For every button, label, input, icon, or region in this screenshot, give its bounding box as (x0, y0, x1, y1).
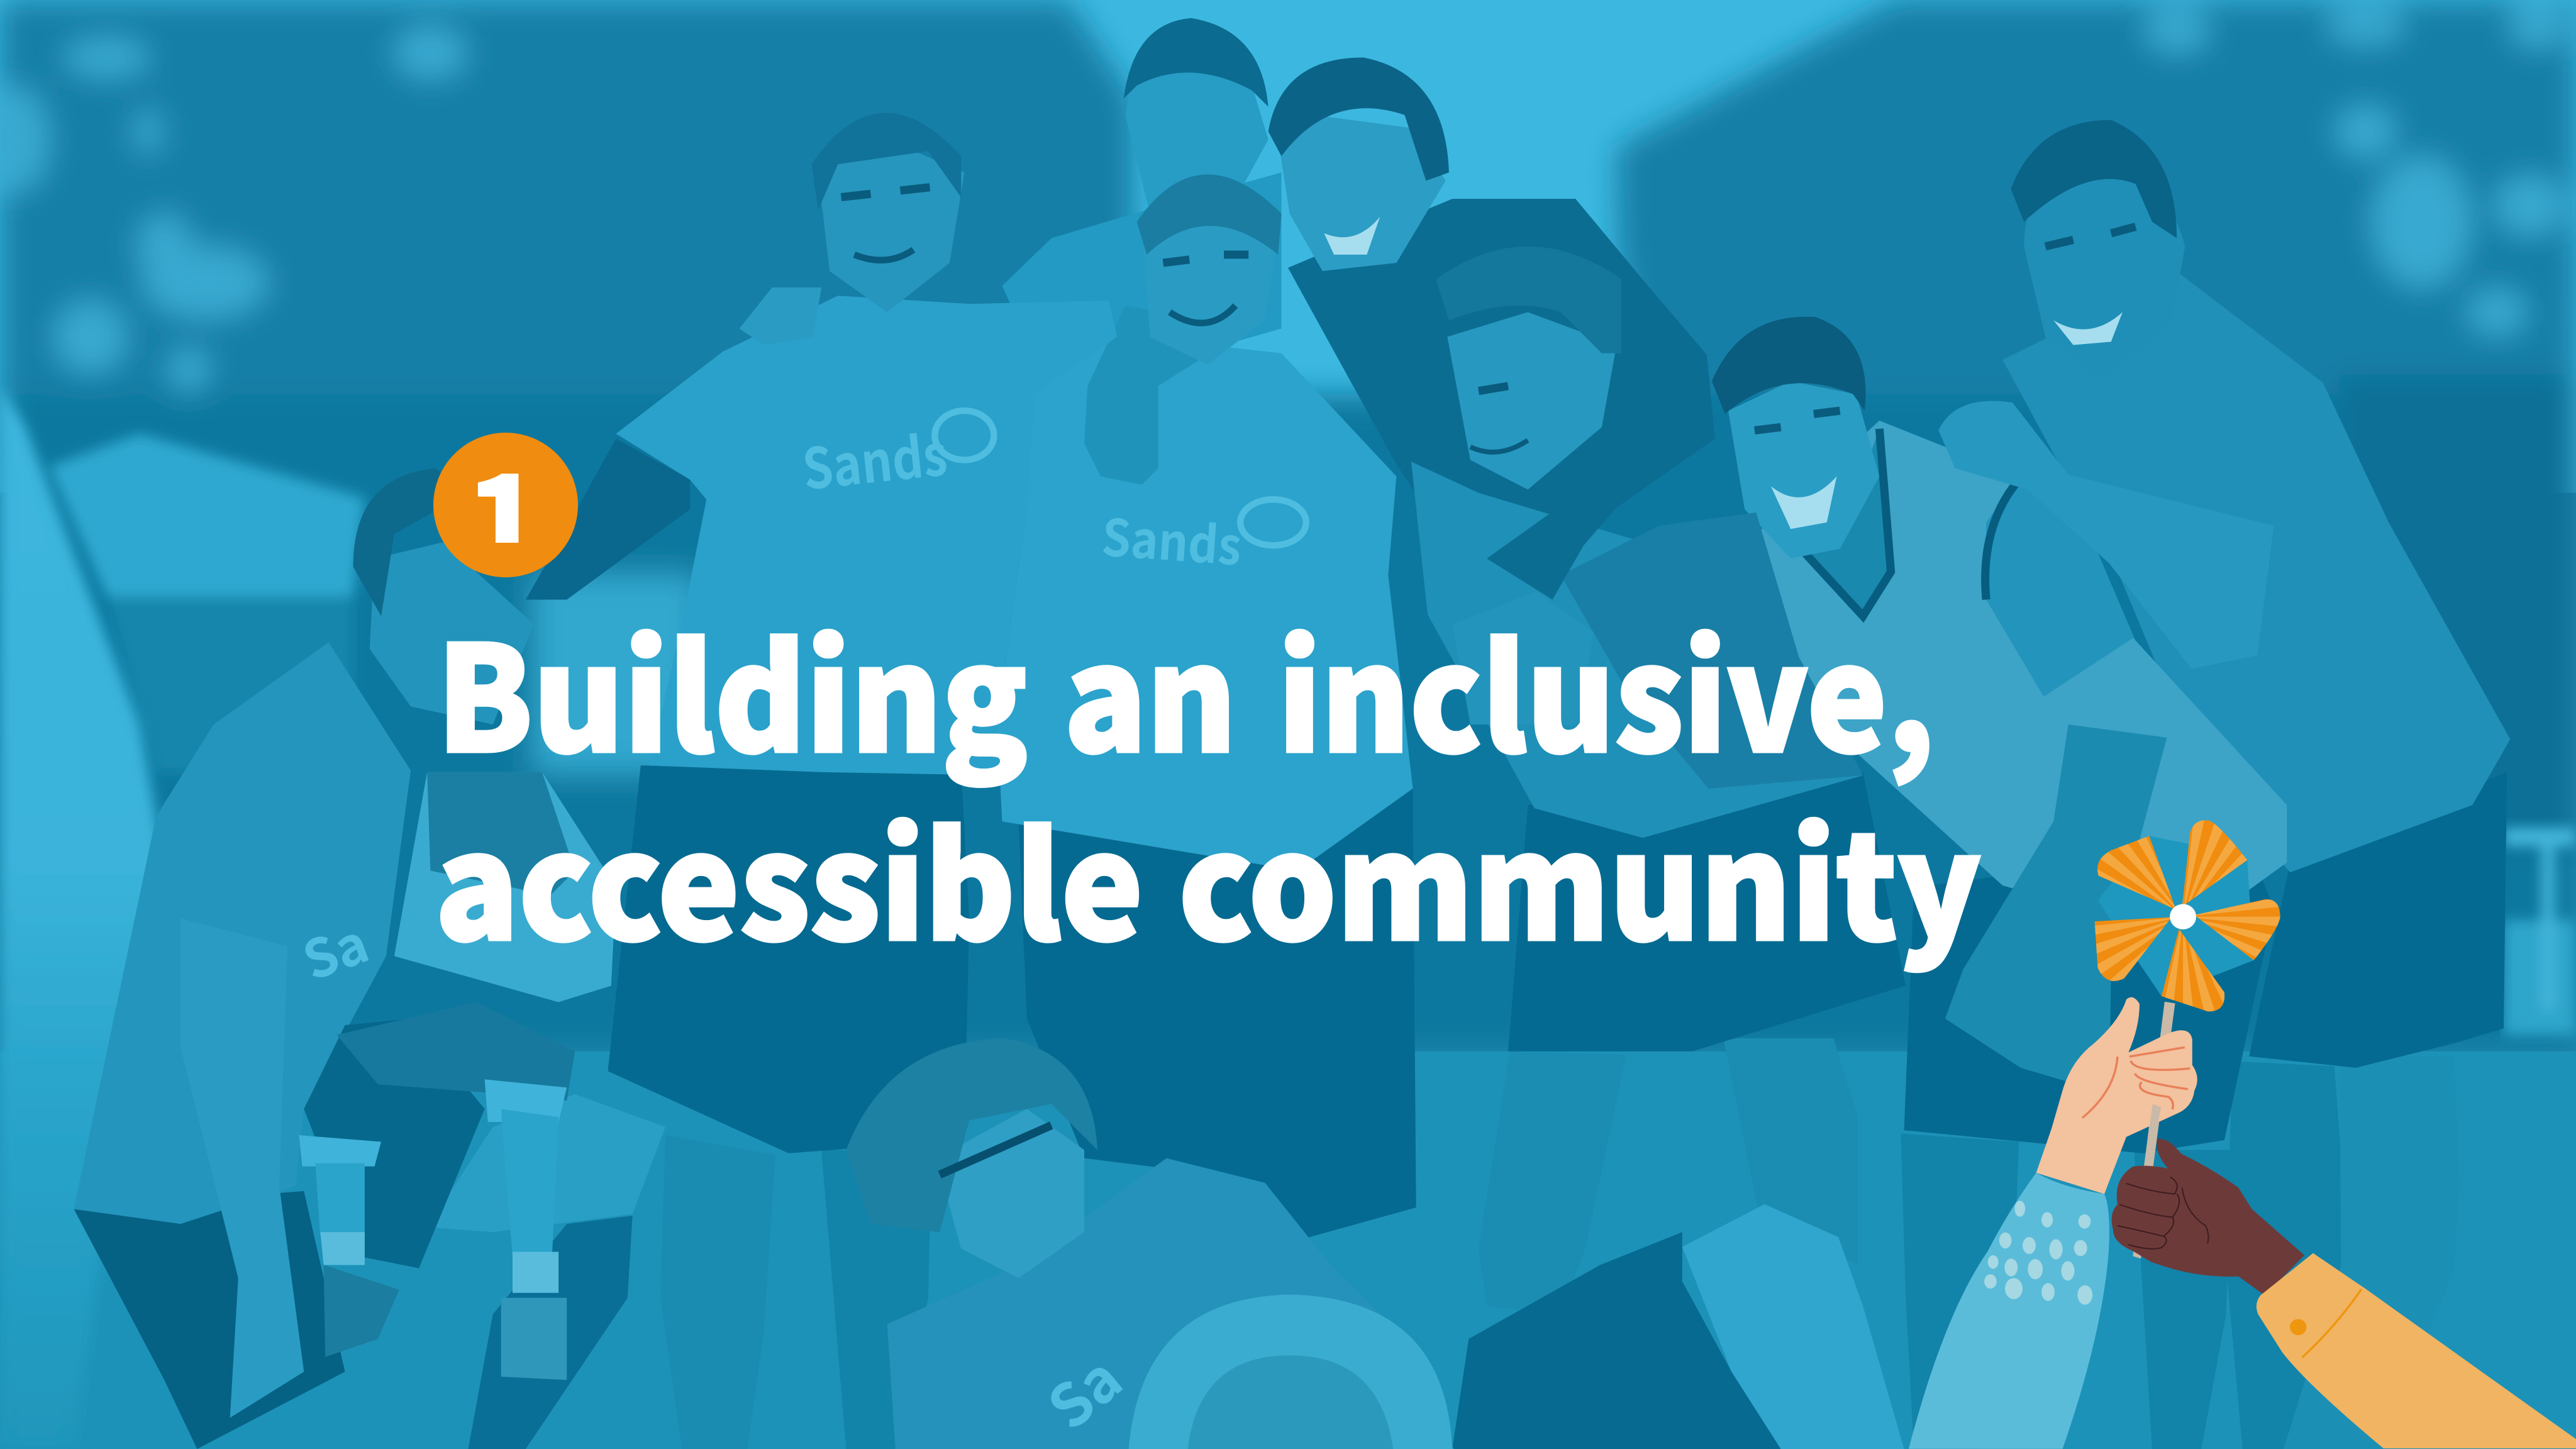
player: far right (2002, 120, 2510, 1449)
player: centre-right, kneeling (1411, 247, 1906, 1314)
title: Building (436, 582, 1028, 794)
title: community (1179, 770, 1981, 982)
ground (569, 1052, 2576, 1087)
tent (49, 434, 365, 772)
shirt logo text: Sa (1028, 1335, 1138, 1446)
background: trees and hedge (0, 0, 2576, 1052)
sky (0, 0, 2576, 493)
number badge: 1 (465, 418, 543, 605)
player: dark shirt (1269, 57, 1715, 591)
shirt logo text: Sa (291, 902, 377, 996)
player: centre (997, 174, 1416, 1240)
white fence (2504, 828, 2576, 1035)
pinwheel stick (2133, 1002, 2175, 1258)
player: back centre (1002, 18, 1282, 341)
player: vest, crouching (1712, 317, 2287, 1449)
player: left of centre (526, 113, 1117, 1449)
illustration: two hands holding a pinwheel (1909, 820, 2576, 1449)
child (394, 772, 616, 1002)
player: far left, holding child (74, 468, 665, 1449)
light-skinned hand and sleeve (1909, 997, 2197, 1449)
title (435, 582, 1981, 982)
shirt logo text: Sands (798, 410, 950, 506)
player: lying at front with trophy plate (846, 1038, 1904, 1449)
number badge (433, 418, 578, 605)
shirt logo text: Sands (1100, 497, 1244, 580)
dark-skinned hand and sleeve (2112, 1139, 2576, 1448)
title: accessible (435, 770, 1143, 982)
title: inclusive, (1278, 582, 1935, 794)
blurred foreground figure (0, 394, 161, 1346)
pinwheel (2095, 820, 2280, 1011)
player: far right, arm over team-mate (1938, 401, 2273, 669)
title: an (1064, 582, 1236, 794)
